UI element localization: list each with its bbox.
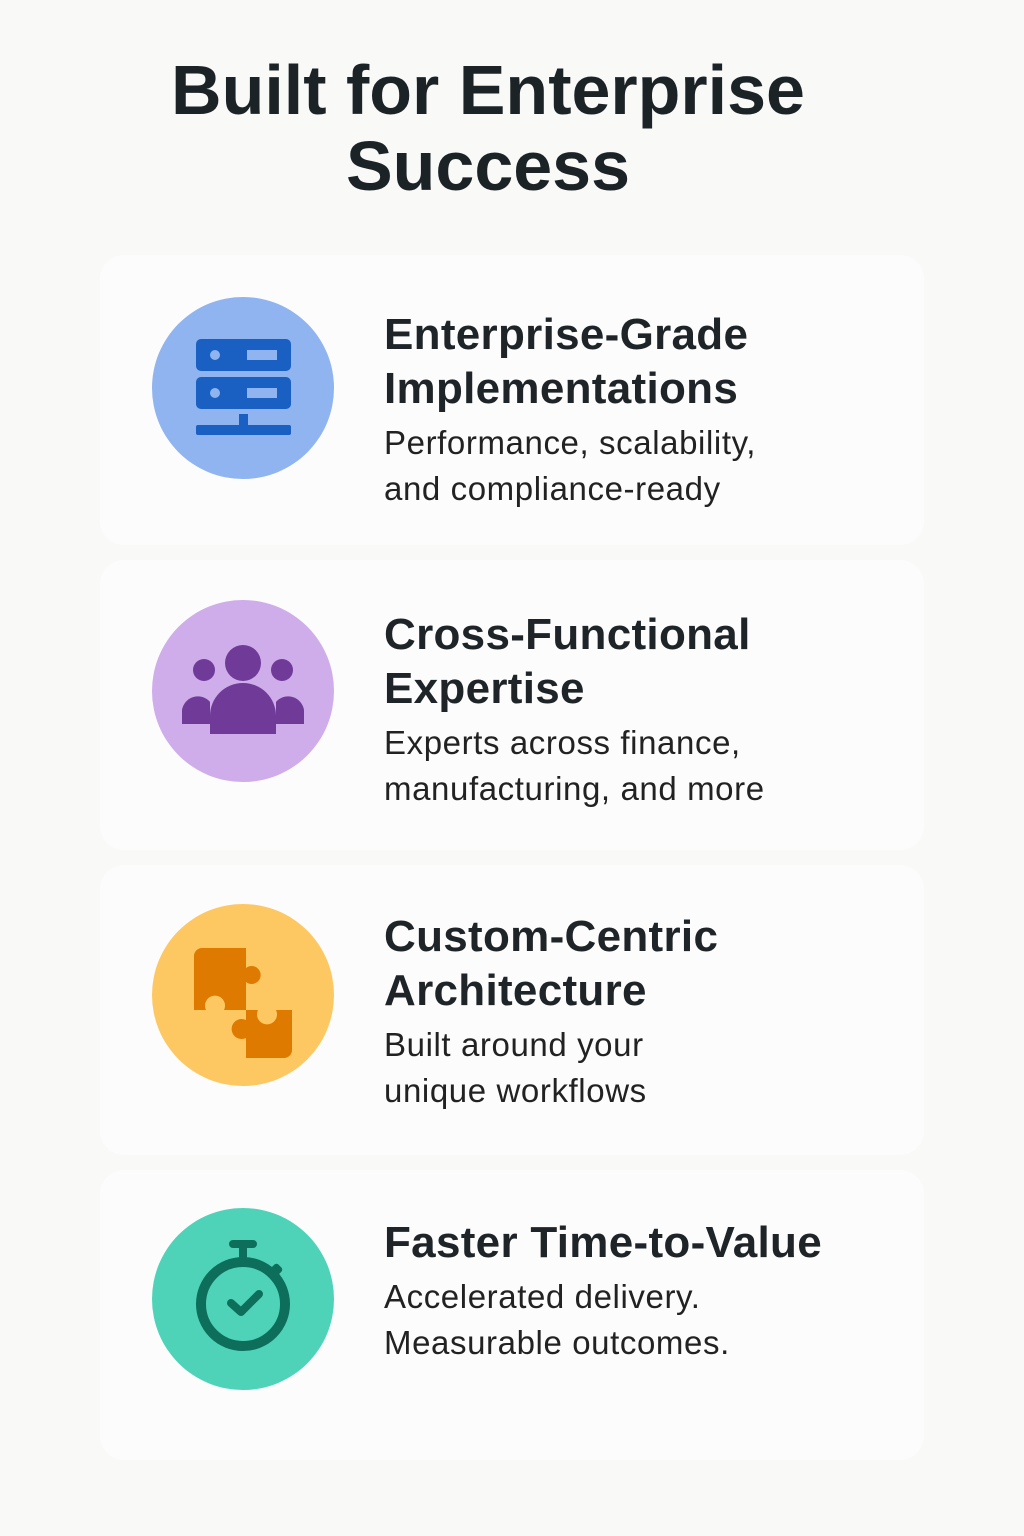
- panel: enterprise-grade card: [100, 255, 924, 545]
- text: cross-functional: Experts across finance,: [384, 724, 741, 761]
- panel: cross-functional card: [100, 560, 924, 850]
- panel: time-to-value card: [100, 1170, 924, 1460]
- icon: team: [152, 600, 334, 782]
- text: custom-centric: Custom-Centric: [384, 912, 718, 961]
- text: enterprise-grade: Enterprise-Grade: [384, 310, 748, 359]
- text: custom-centric: unique workflows: [384, 1072, 647, 1109]
- text: cross-functional: Expertise: [384, 664, 585, 713]
- icon: server: [152, 297, 334, 479]
- text: time-to-value: Measurable outcomes.: [384, 1324, 730, 1361]
- text: custom-centric: Built around your: [384, 1026, 644, 1063]
- text: enterprise-grade: Implementations: [384, 364, 738, 413]
- title: Built for Enterprise: [171, 51, 805, 129]
- text: time-to-value: Faster Time-to-Value: [384, 1218, 822, 1267]
- panel: custom-centric card: [100, 865, 924, 1155]
- text: cross-functional: Cross-Functional: [384, 610, 751, 659]
- text: enterprise-grade: Performance, scalability,: [384, 424, 756, 461]
- text: time-to-value: [384, 1218, 822, 1361]
- text: enterprise-grade: and compliance-ready: [384, 470, 721, 507]
- title: [171, 51, 805, 205]
- text: enterprise-grade: [384, 310, 756, 507]
- text: custom-centric: [384, 912, 718, 1109]
- title: Success: [346, 127, 630, 205]
- icon: stopwatch: [152, 1208, 334, 1390]
- icon: puzzle: [152, 904, 334, 1086]
- text: cross-functional: manufacturing, and more: [384, 770, 765, 807]
- text: time-to-value: Accelerated delivery.: [384, 1278, 700, 1315]
- text: custom-centric: Architecture: [384, 966, 647, 1015]
- text: cross-functional: [384, 610, 765, 807]
